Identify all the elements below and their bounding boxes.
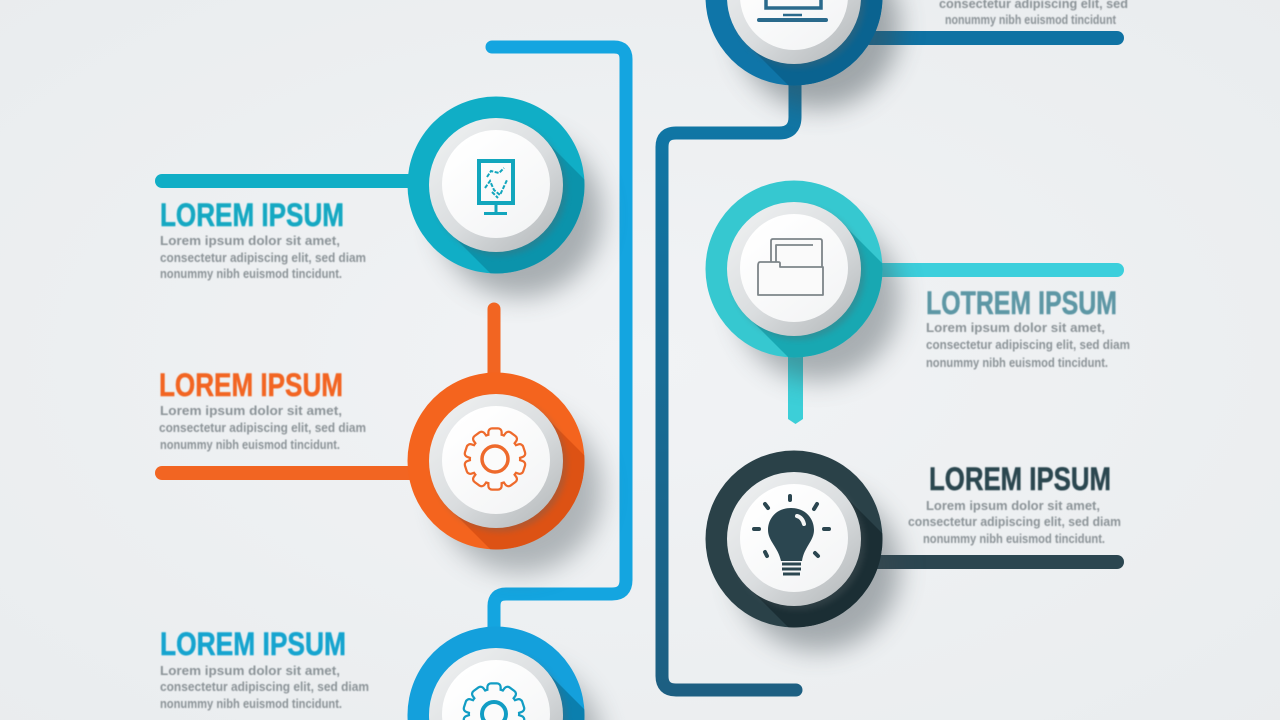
connector: blue line xyxy=(492,47,626,640)
slate leader line xyxy=(870,555,1117,569)
orange disc xyxy=(408,372,616,587)
heading: LOREM IPSUM xyxy=(929,461,1111,497)
slate disc xyxy=(706,450,914,666)
orange leader line xyxy=(162,466,420,480)
text block: Lorem ipsum dolor sit amet, xyxy=(160,403,342,418)
connector: dark blue line xyxy=(662,70,796,690)
icon: folder xyxy=(758,239,823,295)
icon: blue gear xyxy=(464,684,524,720)
panel: turquoise node xyxy=(706,180,1130,424)
text block xyxy=(160,663,369,711)
text block xyxy=(160,233,366,281)
icon: monitor xyxy=(479,161,513,214)
icon: laptop xyxy=(759,0,826,20)
heading: LOREM IPSUM xyxy=(159,367,343,403)
text block: nonummy nibh euismod tincidunt xyxy=(945,12,1117,27)
blue disc xyxy=(408,626,612,720)
panel: dark blue node xyxy=(706,0,1128,124)
text block: consectetur adipiscing elit, sed diam xyxy=(908,514,1121,529)
text block: nonummy nibh euismod tincidunt. xyxy=(923,531,1105,546)
turquoise leader line xyxy=(870,263,1117,277)
turquoise bottom stub xyxy=(788,345,803,424)
text block xyxy=(159,403,366,452)
teal disc xyxy=(408,96,616,311)
dark blue disc xyxy=(706,0,914,124)
icon: orange gear xyxy=(465,430,525,488)
panel: dark slate node xyxy=(706,450,1121,689)
text block: nonummy nibh euismod tincidunt. xyxy=(160,266,342,281)
heading: LOTREM IPSUM xyxy=(926,285,1117,321)
text block: nonummy nibh euismod tincidunt. xyxy=(160,437,340,452)
dark blue leader line xyxy=(870,31,1117,45)
text block: consectetur adipiscing elit, sed diam xyxy=(160,679,369,694)
heading: LOREM IPSUM xyxy=(160,626,346,662)
text block xyxy=(926,320,1130,370)
heading: LOREM IPSUM xyxy=(160,197,344,233)
text block: Lorem ipsum dolor sit amet, xyxy=(160,663,340,678)
text block: nonummy nibh euismod tincidunt. xyxy=(160,696,342,711)
text block: consectetur adipiscing elit, sed diam xyxy=(159,420,366,435)
panel: blue node xyxy=(160,626,646,720)
text block: consectetur adipiscing elit, sed diam xyxy=(926,337,1130,352)
orange top stub xyxy=(488,309,500,385)
text block xyxy=(908,498,1121,546)
icon: light bulb xyxy=(754,496,829,574)
text block: nonummy nibh euismod tincidunt. xyxy=(926,355,1108,370)
text block: Lorem ipsum dolor sit amet, xyxy=(160,233,340,248)
text block: Lorem ipsum dolor sit amet, xyxy=(926,320,1105,335)
text block xyxy=(939,0,1128,27)
text block: Lorem ipsum dolor sit amet, xyxy=(926,498,1100,513)
panel: teal node xyxy=(160,96,646,335)
text block: consectetur adipiscing elit, sed diam xyxy=(160,250,366,265)
turquoise disc xyxy=(706,180,914,395)
panel: orange node xyxy=(155,302,616,587)
teal leader line xyxy=(162,174,420,188)
